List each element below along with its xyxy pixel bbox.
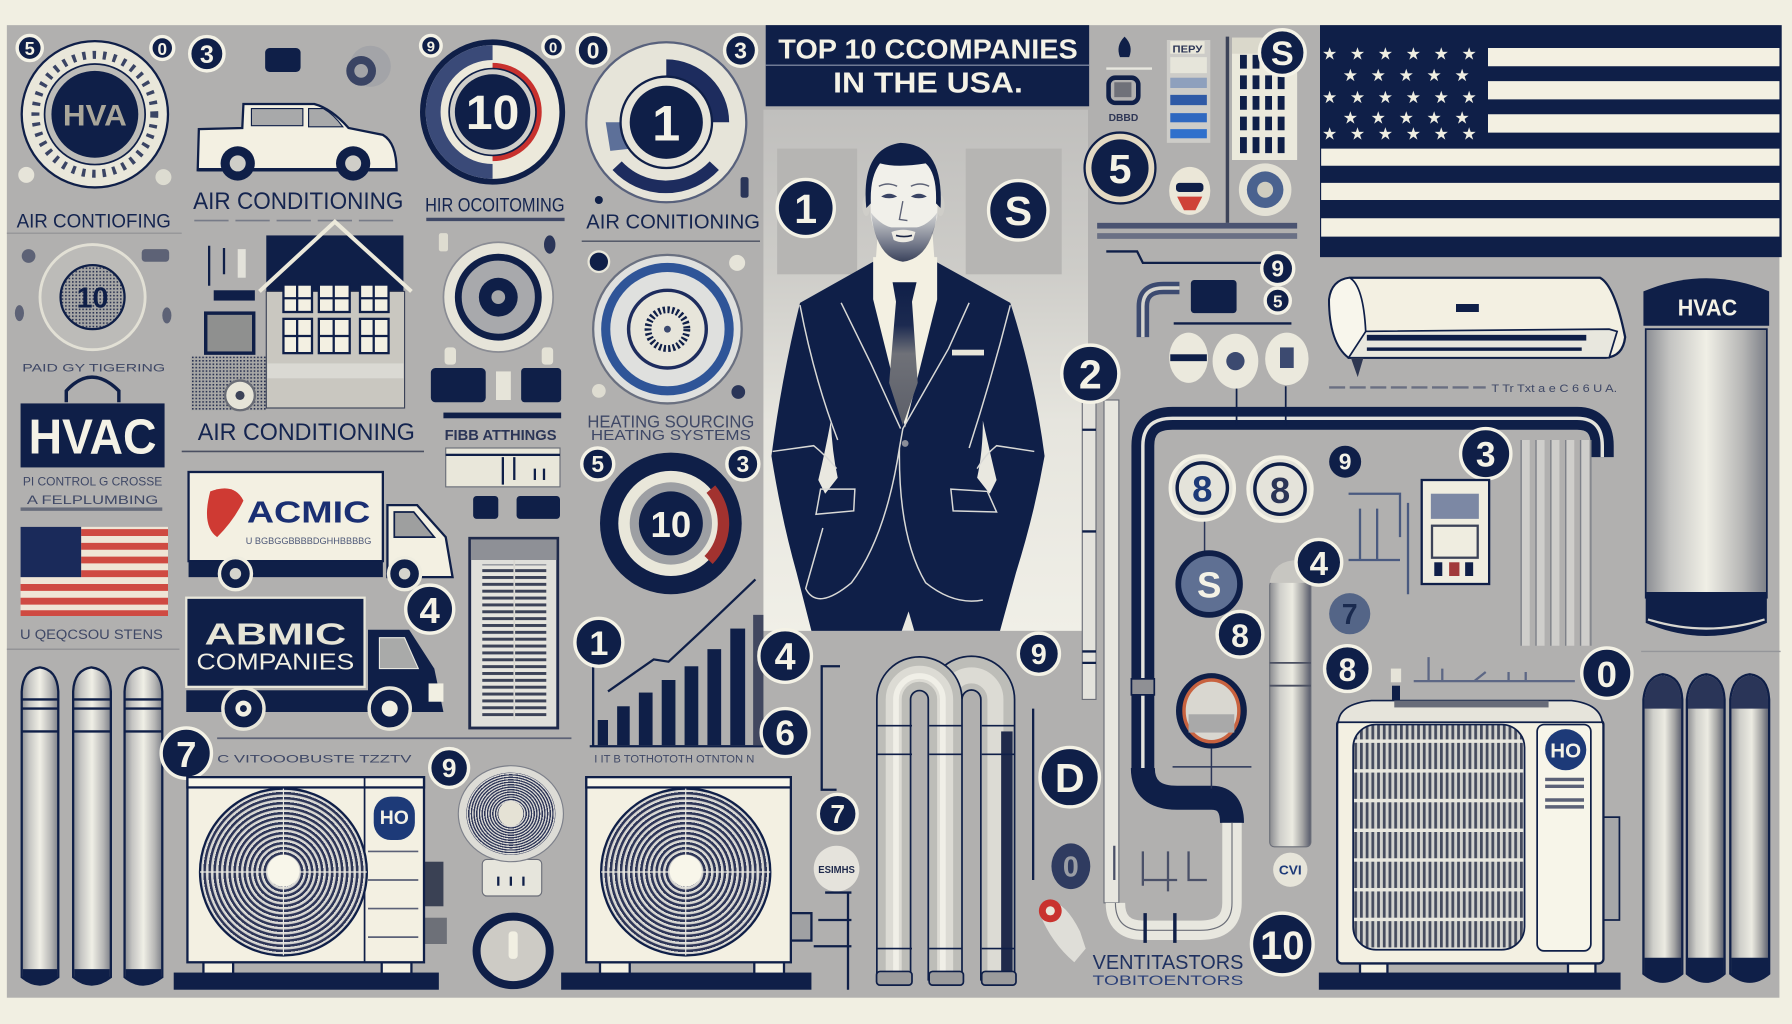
dark ring xyxy=(477,917,550,985)
duct pipe xyxy=(1270,560,1311,847)
small icons left of house xyxy=(206,246,255,353)
delivery truck ACMIC: ACMIC xyxy=(247,494,370,529)
HVAC sign with handle xyxy=(21,377,165,467)
scrawl label xyxy=(443,413,561,444)
control strip xyxy=(446,448,560,487)
side boxes behind the man xyxy=(777,149,857,274)
badge 4 xyxy=(759,630,811,682)
badge 0 xyxy=(151,37,174,59)
schematic marks inside the loop xyxy=(1114,846,1207,891)
big navy and white pipe xyxy=(1115,418,1602,943)
ventilators label xyxy=(1093,951,1243,988)
scrawl underline 4 xyxy=(582,240,760,242)
delivery truck ACMIC xyxy=(189,472,453,590)
coin side marks xyxy=(15,249,171,323)
HVAC sign with handle: HVAC xyxy=(29,411,157,465)
badge 10 xyxy=(1251,913,1313,975)
badge 3 xyxy=(725,34,757,66)
ventilators label: VENTITASTORS xyxy=(1093,951,1243,974)
right arch xyxy=(945,673,998,981)
gray coin with 10: 10 xyxy=(77,282,108,314)
dial 1 side marks xyxy=(595,177,749,204)
badge 0 xyxy=(577,34,609,66)
delivery truck ACMIC: U BGBGGBBBBDGHHBBBBG xyxy=(246,536,371,546)
dial 10: 10 xyxy=(466,87,519,140)
outdoor AC unit left xyxy=(174,777,447,990)
blue strips card: ПЕРУ xyxy=(1173,45,1203,56)
label: air conditioning 3: HIR OCOITOMING xyxy=(425,194,565,216)
arm gaps xyxy=(818,421,838,494)
blue target dial xyxy=(593,255,742,403)
navy truck COMPANIES: ABMIC xyxy=(205,617,346,652)
dial 1 xyxy=(586,42,746,202)
badge 8 xyxy=(1217,611,1263,657)
navy truck COMPANIES: COMPANIES xyxy=(197,649,354,675)
thin rule above right cylinders xyxy=(1641,650,1781,652)
red fitting xyxy=(1039,899,1086,962)
wall mounted AC unit xyxy=(1329,278,1625,377)
badge S ringed blue: S xyxy=(1197,565,1221,606)
thin white pipes below badge 2 xyxy=(1082,400,1119,903)
lower dial 10: 10 xyxy=(651,504,691,545)
badge 4: 4 xyxy=(775,636,796,678)
badge 8 ringed: 8 xyxy=(1270,470,1290,511)
scrawl label: FIBB ATTHINGS xyxy=(445,428,557,444)
badge 7 xyxy=(161,728,211,778)
badge 9 xyxy=(1262,253,1294,285)
HVAC tank: HVAC xyxy=(1678,294,1737,320)
bracket lines xyxy=(814,666,851,990)
rule under small flag xyxy=(7,648,179,650)
faded badge 0: 0 xyxy=(1063,852,1079,884)
chart scrawl: I IT B TOTHOTOTH OTNTON N xyxy=(594,753,754,765)
badge 3: 3 xyxy=(200,41,214,69)
pocket flaps xyxy=(816,489,997,514)
faded badge 7 xyxy=(1329,593,1370,634)
badge 3: 3 xyxy=(734,37,747,63)
badge 9: 9 xyxy=(1339,449,1352,475)
badge 9 xyxy=(1018,633,1059,674)
HVAC seal: HVA xyxy=(63,100,127,133)
left cylinders xyxy=(22,667,162,985)
badge 9: 9 xyxy=(442,753,456,783)
big US flag navy and cream xyxy=(1320,25,1782,257)
badge 0: 0 xyxy=(1597,654,1617,695)
faded badge 0 xyxy=(1051,843,1090,889)
badge 4 xyxy=(1296,539,1342,585)
scrawl under wall unit: T Tr Txt a e C 6 6 U A. xyxy=(1491,383,1617,395)
badge 6 xyxy=(761,709,809,757)
lighter backdrop behind the man xyxy=(763,110,1088,631)
badge 5 xyxy=(17,35,42,61)
scrawl divider: C VITOOOBUSTE TZZTV xyxy=(217,753,412,765)
hem split xyxy=(902,611,914,631)
badge 2: 2 xyxy=(1079,352,1102,398)
outdoor unit right xyxy=(1319,701,1621,990)
pocket square xyxy=(952,350,984,355)
faded badge 7: 7 xyxy=(1342,599,1358,631)
tie xyxy=(889,282,918,425)
badge 8 ringed: 8 xyxy=(1192,469,1212,510)
ventilators label: TOBITOENTORS xyxy=(1093,973,1243,988)
lapels and seams xyxy=(773,303,1034,601)
badge 7 xyxy=(818,794,857,833)
scrawl strip xyxy=(1097,223,1297,239)
badge 2 xyxy=(1062,345,1119,402)
badge 5 xyxy=(582,448,614,480)
outdoor AC unit center xyxy=(561,777,811,990)
badge 9: 9 xyxy=(1271,256,1284,282)
badge 9: 9 xyxy=(427,39,435,55)
neck and head xyxy=(875,234,935,279)
badge 3: 3 xyxy=(1476,434,1496,474)
badge S: S xyxy=(1271,35,1294,73)
control panel card xyxy=(1422,480,1489,584)
round tag xyxy=(814,846,859,891)
tiny parts row xyxy=(431,368,561,402)
beard xyxy=(871,213,937,262)
badge S ringed blue xyxy=(1178,553,1240,615)
scrawl under small flag: U QEQCSOU STENS xyxy=(20,627,163,642)
badge 7: 7 xyxy=(176,734,196,775)
building strip xyxy=(1227,37,1297,223)
label: air conditioning 4: AIR CONITIONING xyxy=(586,211,760,234)
scrawl under HVAC sign xyxy=(21,475,162,511)
small dial side marks xyxy=(439,233,555,365)
faded schematic scrawl above outdoor unit xyxy=(1414,657,1575,681)
shirt xyxy=(873,257,937,427)
small scrawl: DBBD xyxy=(1109,113,1138,124)
label: air conditioning 2: AIR CONDITIONING xyxy=(193,188,403,215)
scrawl underline 2 xyxy=(194,220,400,222)
badge 0 xyxy=(543,37,563,57)
badge 3 xyxy=(190,37,224,71)
outdoor unit right: HO xyxy=(1550,740,1581,763)
blue dial side marks xyxy=(589,251,745,399)
seal side dots xyxy=(18,167,171,185)
badge 9: 9 xyxy=(1031,639,1047,671)
big US flag navy and cream: ★★★★★ xyxy=(1343,65,1482,85)
round seal xyxy=(1239,163,1291,216)
badge 10: 10 xyxy=(1260,924,1305,968)
badge 5: 5 xyxy=(25,38,35,59)
badge 9 xyxy=(421,35,441,56)
badge 4: 4 xyxy=(420,590,441,631)
badge D: D xyxy=(1055,755,1085,801)
jacket button xyxy=(902,440,909,447)
white pickup truck xyxy=(198,104,397,181)
badge 5: 5 xyxy=(1273,291,1283,311)
elbow pipe xyxy=(1143,288,1179,337)
ornament with red xyxy=(1169,167,1210,215)
radiator fins xyxy=(1521,440,1591,646)
tiny dark keys xyxy=(473,496,560,519)
label: air conditioning 1: AIR CONTIOFING xyxy=(17,210,171,232)
scrawl underline 3 xyxy=(426,218,565,221)
big US flag navy and cream: ★★★★★★ xyxy=(1322,87,1489,107)
badge 3 xyxy=(727,448,759,480)
badge 0: 0 xyxy=(549,41,557,57)
badge 9 xyxy=(1329,446,1361,478)
badge 1: 1 xyxy=(589,625,608,663)
lower dial 10 xyxy=(600,453,742,594)
badge 7: 7 xyxy=(830,799,845,829)
small US flag xyxy=(21,527,168,616)
badge 4: 4 xyxy=(1310,546,1329,583)
rule under label 5 xyxy=(182,450,424,452)
badge 5: 5 xyxy=(591,451,604,477)
knob icon xyxy=(346,46,391,87)
badge 8: 8 xyxy=(1231,618,1249,654)
badge D xyxy=(1040,747,1099,807)
badge S xyxy=(989,181,1048,240)
label: heating systems: HEATING SYSTEMS xyxy=(591,428,751,444)
number badges beside the man xyxy=(777,179,834,237)
big US flag navy and cream: ★★★★★ xyxy=(1343,107,1482,127)
title banner xyxy=(766,25,1089,106)
label: heating systems xyxy=(587,411,754,444)
section rule left xyxy=(7,232,182,234)
small dark box icon xyxy=(265,48,301,72)
big US flag navy and cream: ★★★★★★ xyxy=(1322,123,1489,143)
badge 8: 8 xyxy=(1339,652,1356,688)
schematic scraps xyxy=(1349,494,1408,594)
bracket line to badge 9 xyxy=(1106,251,1266,263)
HVAC seal xyxy=(22,41,168,187)
bar chart with trend line xyxy=(590,579,763,746)
dial 10 xyxy=(423,42,562,182)
jacket xyxy=(771,262,1045,631)
badge 8 ringed xyxy=(1248,457,1312,521)
badge 8 xyxy=(1325,646,1370,691)
navy truck COMPANIES xyxy=(186,598,443,729)
badge S: S xyxy=(1005,188,1032,234)
badge 0: 0 xyxy=(587,37,600,63)
eyes, nose, mouth xyxy=(881,194,927,198)
badge 8 ringed xyxy=(1170,456,1234,520)
badge 1 xyxy=(575,618,623,666)
man in a navy suit xyxy=(771,143,1062,631)
gauge lead lines xyxy=(1173,520,1251,789)
thin valve line xyxy=(1032,709,1034,880)
HVAC tank xyxy=(1643,278,1769,636)
number badges beside the man: 1 xyxy=(794,186,817,232)
badge 4 xyxy=(406,585,454,633)
gray coin with 10 xyxy=(40,245,145,350)
hanging ornaments xyxy=(1169,323,1309,425)
title banner: IN THE USA. xyxy=(833,68,1023,100)
right cylinders xyxy=(1643,674,1769,982)
small fan xyxy=(458,766,563,896)
stars: ★★★★★★ xyxy=(1322,43,1489,63)
outdoor AC unit left: HO xyxy=(380,807,409,829)
badge 5 ringed: 5 xyxy=(1109,146,1131,192)
badge 3: 3 xyxy=(736,451,749,477)
left arch xyxy=(894,674,945,981)
badge 5 ringed xyxy=(1085,133,1155,203)
scrawl under HVAC sign: PI CONTROL G CROSSE xyxy=(23,475,162,489)
camera icon xyxy=(1106,37,1152,103)
small scrawl text left: PAID GY TIGERING xyxy=(22,362,165,374)
small dial xyxy=(443,242,553,352)
badge S xyxy=(1259,30,1305,75)
house xyxy=(191,222,411,410)
gauge xyxy=(1176,673,1247,749)
badge 0: 0 xyxy=(158,39,167,59)
small tag: CVI xyxy=(1279,863,1302,877)
U-shaped duct pipes xyxy=(877,673,1016,985)
badge 6: 6 xyxy=(775,713,795,753)
blue strips card xyxy=(1167,40,1210,143)
round tag: ESIMHS xyxy=(818,865,855,876)
scrawl under HVAC sign: A FELPLUMBING xyxy=(27,493,158,507)
navy box xyxy=(1191,280,1237,313)
badge 0 xyxy=(1582,648,1632,698)
dial 1: 1 xyxy=(652,95,680,152)
badge 5 xyxy=(1265,288,1290,313)
air filter xyxy=(470,538,558,728)
hair xyxy=(866,143,941,208)
label: air conditioning 5: AIR CONDITIONING xyxy=(198,419,415,446)
label: heating systems: HEATING SOURCING xyxy=(587,411,754,431)
title banner: TOP 10 CCOMPANIES xyxy=(778,33,1078,64)
badge 9 xyxy=(430,749,469,787)
badge 3 xyxy=(1461,429,1511,479)
small tag xyxy=(1273,853,1307,887)
valve stick xyxy=(1390,669,1402,754)
